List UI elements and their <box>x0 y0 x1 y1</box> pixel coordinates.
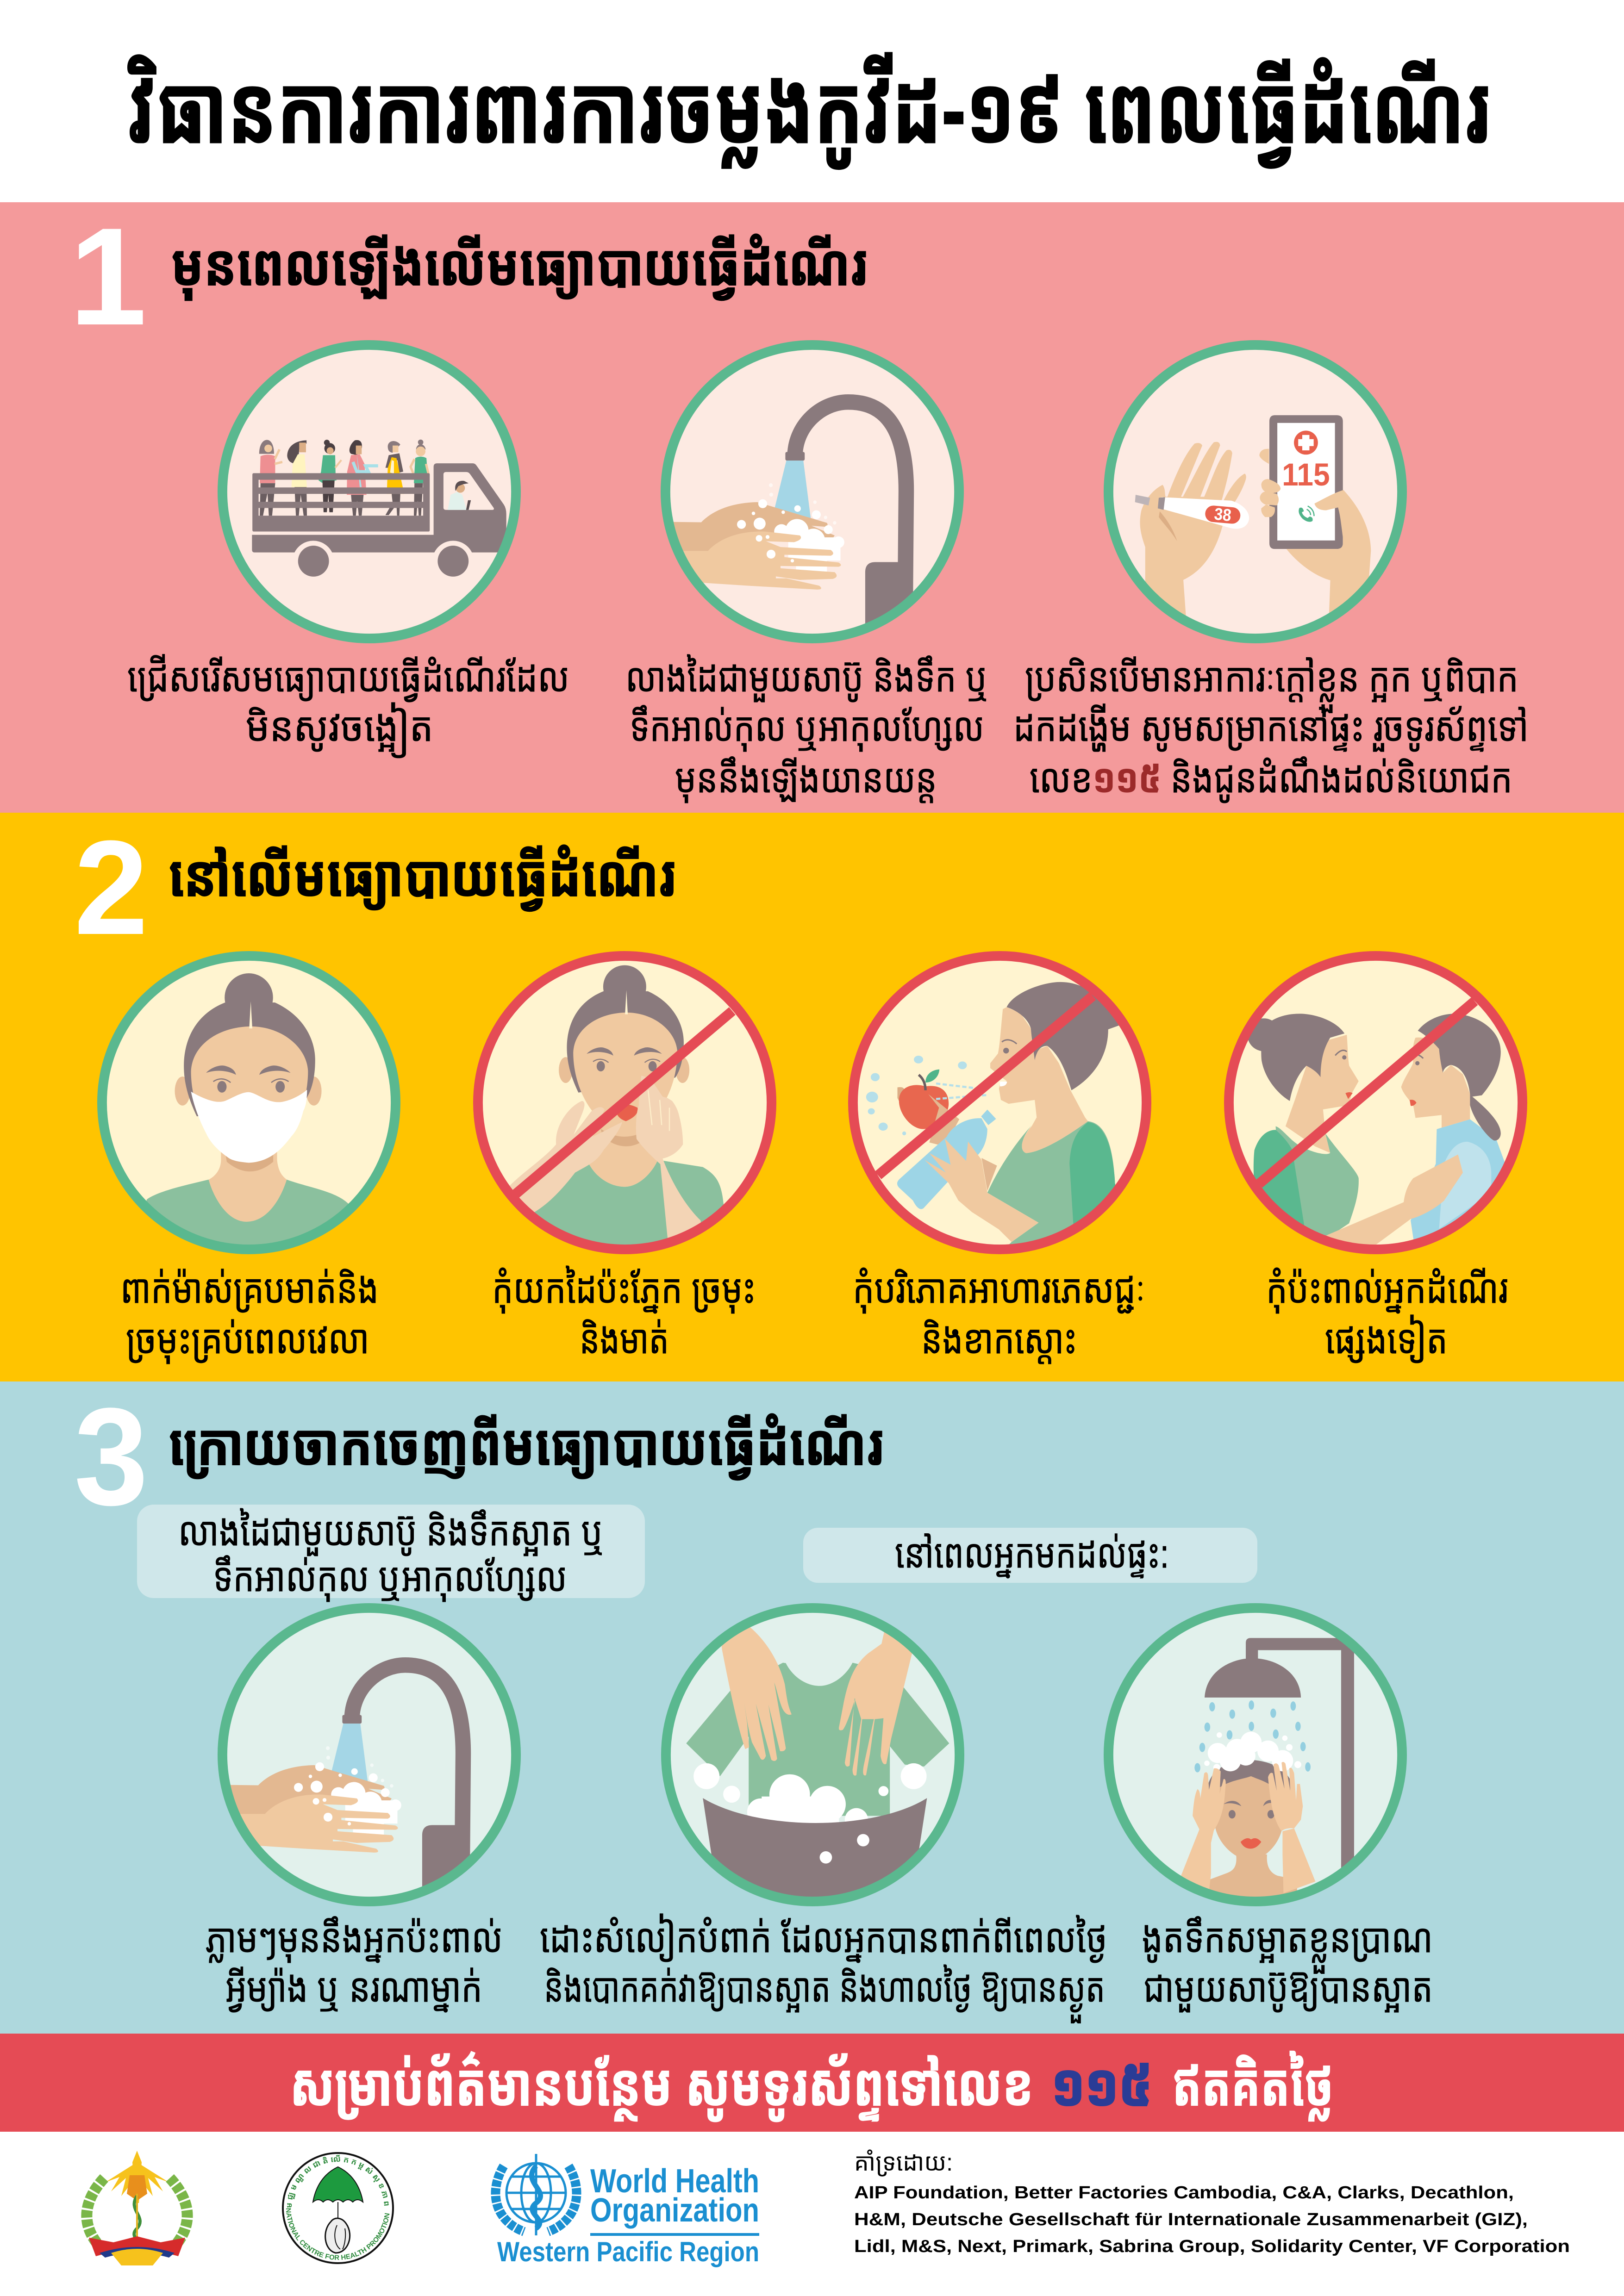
caption: do not eat <box>853 1267 1145 1364</box>
banner: hotline <box>0 2034 1624 2132</box>
caption 2: ទឹកអាល់កុល ឬអាកុលហ្សែល <box>630 704 984 752</box>
caption: wear mask: ពាក់ម៉ាស់គ្របមាត់និង <box>120 1267 379 1313</box>
caption: do not touch others: ផ្សេងទៀត <box>1325 1314 1448 1363</box>
callout: when you arrive home: នៅពេលអ្នកមកដល់ផ្ទះ: <box>895 1532 1169 1578</box>
caption: remove clothes: ដោះសំលៀកបំពាក់ ដែលអ្នកបានពាក់ពីពេលថ្ងៃ <box>540 1913 1107 1963</box>
icon: do not eat or drink <box>853 956 1147 1250</box>
droplets <box>866 1056 967 1135</box>
panel: on the transport <box>0 813 1624 1381</box>
icon: washing hands <box>222 1608 516 1905</box>
caption: do not touch <box>492 1265 756 1362</box>
icon: shower <box>1108 1608 1402 1905</box>
face and neck <box>990 1007 1088 1153</box>
icon: woman wearing mask <box>102 956 396 1260</box>
panel: after leaving <box>0 1379 1624 2034</box>
caption 2: លាងដៃជាមួយសាប៊ូ និងទឹក ឬ <box>625 654 988 702</box>
text block: sponsors: AIP Foundation, Better Factories Cambodia, C&A, Clarks, Decathlon, <box>854 2183 1514 2203</box>
logo: World Health Organization Western Pacific Region: Western Pacific Region <box>497 2236 759 2267</box>
banner: hotline: ១១៥ <box>1051 2053 1152 2118</box>
icon: truck with passengers <box>222 345 516 639</box>
banner: hotline: សម្រាប់ព័ត៌មានបន្ថែម សូមទូរស័ព្ទទៅលេខ <box>290 2051 1034 2122</box>
callout: when you arrive home <box>803 1528 1257 1583</box>
caption 3: ប្រសិនបើមានអាការៈក្តៅខ្លួន ក្អក ឬពិបាក <box>1025 655 1518 713</box>
hands and arms <box>1181 1768 1226 1891</box>
heading 2: នៅលើមធ្យោបាយធ្វើដំណើរ <box>169 845 676 912</box>
section number 2: 2 <box>74 813 148 963</box>
caption 3: ដកដង្ហើម សូមសម្រាកនៅផ្ទះ រួចទូរស័ព្ទទៅ <box>1013 703 1529 752</box>
caption: shower: ងូតទឹកសម្អាតខ្លួនប្រាណ <box>1142 1916 1433 1973</box>
right hand <box>1287 490 1371 642</box>
caption 3 <box>1013 655 1529 803</box>
caption: do not eat: និងខាកស្តោះ <box>921 1318 1077 1364</box>
body <box>987 1121 1119 1249</box>
logo: World Health Organization Western Pacific Region: World Health <box>590 2163 759 2200</box>
truck window <box>443 472 494 510</box>
banner: hotline: ឥតគិតថ្លៃ <box>1172 2051 1334 2121</box>
caption: wear mask <box>120 1267 379 1364</box>
caption: remove clothes: និងបោកគក់វាឱ្យបានស្អាត និងហាលថ្ងៃ ឱ្យបានស្ងួត <box>544 1964 1105 2023</box>
person 6 <box>411 440 428 516</box>
caption: immediately: អ្វីម្យ៉ាង ឬ នរណាម្នាក់ <box>225 1966 482 2012</box>
foam <box>1204 1732 1301 1771</box>
callout: wash hands: ទឹកអាល់កុល ឬអាកុលហ្សែល <box>213 1555 567 1602</box>
logo: National Centre for Health Promotion <box>283 2153 393 2263</box>
text block: sponsors <box>854 2149 1570 2256</box>
caption: do not touch: និងមាត់ <box>580 1318 669 1362</box>
text block: sponsors: គាំទ្រដោយ: <box>854 2149 953 2177</box>
neck and shoulders <box>1204 1854 1297 1905</box>
caption: do not touch: កុំយកដៃប៉ះភ្នែក ច្រមុះ <box>492 1265 756 1313</box>
caption: do not eat: កុំបរិភោគអាហារភេសជ្ជៈ <box>853 1267 1145 1313</box>
section number 3: 3 <box>74 1379 148 1534</box>
panel: before boarding <box>0 199 1624 813</box>
hair <box>1007 982 1119 1090</box>
face <box>1215 1776 1282 1861</box>
right person <box>1411 1119 1505 1253</box>
phone <box>1269 415 1343 549</box>
logo: World Health Organization Western Pacific Region: Organization <box>590 2192 759 2229</box>
WHO globe emblem <box>495 2154 577 2235</box>
caption: do not touch others <box>1266 1267 1508 1363</box>
icon: do not touch other passengers <box>1229 956 1523 1253</box>
arm <box>1325 1154 1463 1249</box>
logo: World Health Organization Western Pacific Region <box>495 2154 759 2267</box>
caption: immediately <box>206 1916 503 2012</box>
person 1 <box>259 440 282 516</box>
left hand <box>1140 442 1246 642</box>
icon: washing hands under tap <box>665 345 959 642</box>
person 4 <box>347 440 378 516</box>
icon: do not touch face <box>478 956 772 1260</box>
hair <box>1206 1760 1295 1797</box>
caption 2: មុននឹងឡើងយានយន្ត <box>675 756 937 803</box>
caption: shower: ជាមួយសាប៊ូឱ្យបានស្អាត <box>1143 1966 1433 2012</box>
bottle <box>981 1110 996 1125</box>
apple <box>898 1087 904 1104</box>
icon: thermometer and phone 115: 38 <box>1213 504 1232 525</box>
wheels <box>298 546 329 577</box>
icon: thermometer and phone 115: 115 <box>1282 457 1330 492</box>
section number 1: 1 <box>69 199 147 354</box>
driver <box>448 481 471 510</box>
fingers behind phone <box>1259 449 1269 464</box>
heading 3: ក្រោយចាកចេញពីមធ្យោបាយធ្វើដំណើរ <box>169 1413 884 1481</box>
logo: Ministry of Health emblem <box>87 2151 187 2265</box>
thermometer <box>1135 495 1150 505</box>
heading 1: មុនពេលឡើងលើមធ្យោបាយធ្វើដំណើរ <box>171 234 868 301</box>
text block: sponsors: Lidl, M&S, Next, Primark, Sabrina Group, Solidarity Center, VF Corporation <box>854 2237 1570 2256</box>
caption: immediately: ភ្លាមៗមុននឹងអ្នកប៉ះពាល់ <box>206 1916 503 1963</box>
logo: National Centre for Health Promotion: NATIONAL CENTRE FOR HEALTH PROMOTION <box>284 2208 392 2262</box>
logo: National Centre for Health Promotion: មជ្ឈមណ្ឌលជាតិលើកកម្ពស់សុខភាព <box>285 2154 391 2208</box>
caption 1: ជ្រើសរើសមធ្យោបាយធ្វើដំណើរដែល <box>127 653 569 702</box>
caption 3: លេខ១១៥ និងជូនដំណឹងដល់និយោជក <box>1030 756 1512 803</box>
left person <box>1286 1035 1359 1153</box>
icon: washing clothes <box>666 1608 960 1905</box>
caption 1: មិនសូវចង្អៀត <box>246 702 433 758</box>
caption: do not touch others: កុំប៉ះពាល់អ្នកដំណើរ <box>1266 1267 1508 1313</box>
icon: thermometer and phone 115 <box>1108 345 1402 642</box>
person 3 <box>319 440 341 512</box>
callout: wash hands <box>137 1505 645 1602</box>
person 5 <box>386 441 404 516</box>
truck fence <box>252 473 430 532</box>
caption: remove clothes <box>540 1913 1107 2023</box>
text block: sponsors: H&M, Deutsche Gesellschaft für Internationale Zusammenarbeit (GIZ), <box>854 2210 1528 2229</box>
caption: wear mask: ច្រមុះគ្រប់ពេលវេលា <box>126 1318 369 1364</box>
caption 1 <box>127 653 569 758</box>
caption: shower <box>1142 1916 1433 2012</box>
caption 2 <box>625 654 988 803</box>
truck body and cab <box>252 463 506 553</box>
callout: wash hands: លាងដៃជាមួយសាប៊ូ និងទឹកស្អាត ឬ <box>178 1508 604 1556</box>
person 2 <box>287 440 307 516</box>
